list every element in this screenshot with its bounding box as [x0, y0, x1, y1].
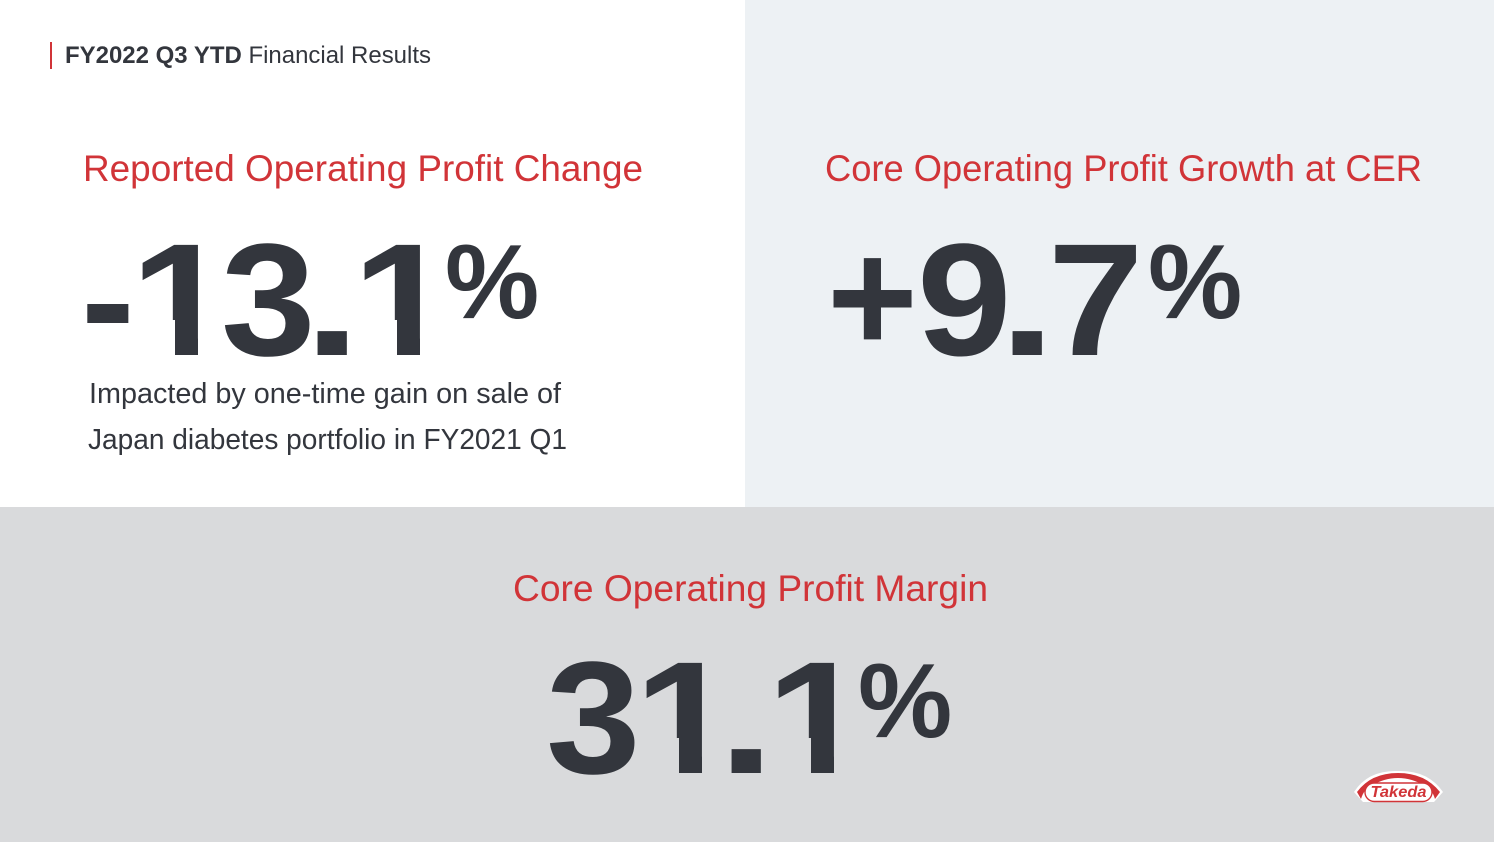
metric: -13.1%: 3: [221, 211, 316, 389]
metric: -13.1%: .: [304, 211, 361, 390]
note: one-time gain: Japan diabetes portfolio in FY2021 Q1: [88, 424, 567, 456]
icon: Takeda logo: [1354, 771, 1443, 802]
panel: reported operating profit: [50, 42, 642, 455]
metric: -13.1%: 1: [130, 211, 232, 389]
metric: +9.7%: 7: [1048, 211, 1143, 390]
panel: core operating profit growth: [745, 0, 1494, 507]
metric: -13.1%: 1: [352, 211, 454, 389]
panel: core operating profit margin: [0, 507, 1494, 842]
metric: +9.7%: +: [827, 208, 918, 386]
note: one-time gain: Impacted by one-time gain on sale of: [89, 378, 562, 410]
section title: FY2022 Q3 YTD Financial Results: [65, 42, 431, 69]
heading: core operating profit growth at CER: Core Operating Profit Growth at CER: [825, 148, 1422, 189]
metric: 31.1%: 1: [766, 629, 868, 807]
note: one-time gain: [88, 378, 567, 456]
metric: +9.7%: %: [1148, 223, 1242, 341]
metric: -13.1%: [87, 243, 536, 357]
metric: +9.7%: [827, 208, 1242, 390]
metric: -13.1%: -: [81, 211, 135, 390]
icon: Takeda logo: Takeda: [1370, 784, 1427, 801]
heading: core operating profit margin: Core Operating Profit Margin: [513, 568, 988, 609]
metric: 31.1%: 1: [634, 629, 736, 807]
heading: reported operating profit change: Reported Operating Profit Change: [83, 148, 643, 189]
metric: 31.1%: .: [718, 629, 775, 808]
metric: 31.1%: %: [858, 642, 952, 760]
metric: +9.7%: .: [998, 211, 1056, 390]
metric: 31.1%: 3: [546, 629, 641, 807]
metric: -13.1%: %: [445, 223, 539, 341]
metric: 31.1%: [550, 661, 950, 775]
metric: +9.7%: 9: [917, 211, 1012, 389]
